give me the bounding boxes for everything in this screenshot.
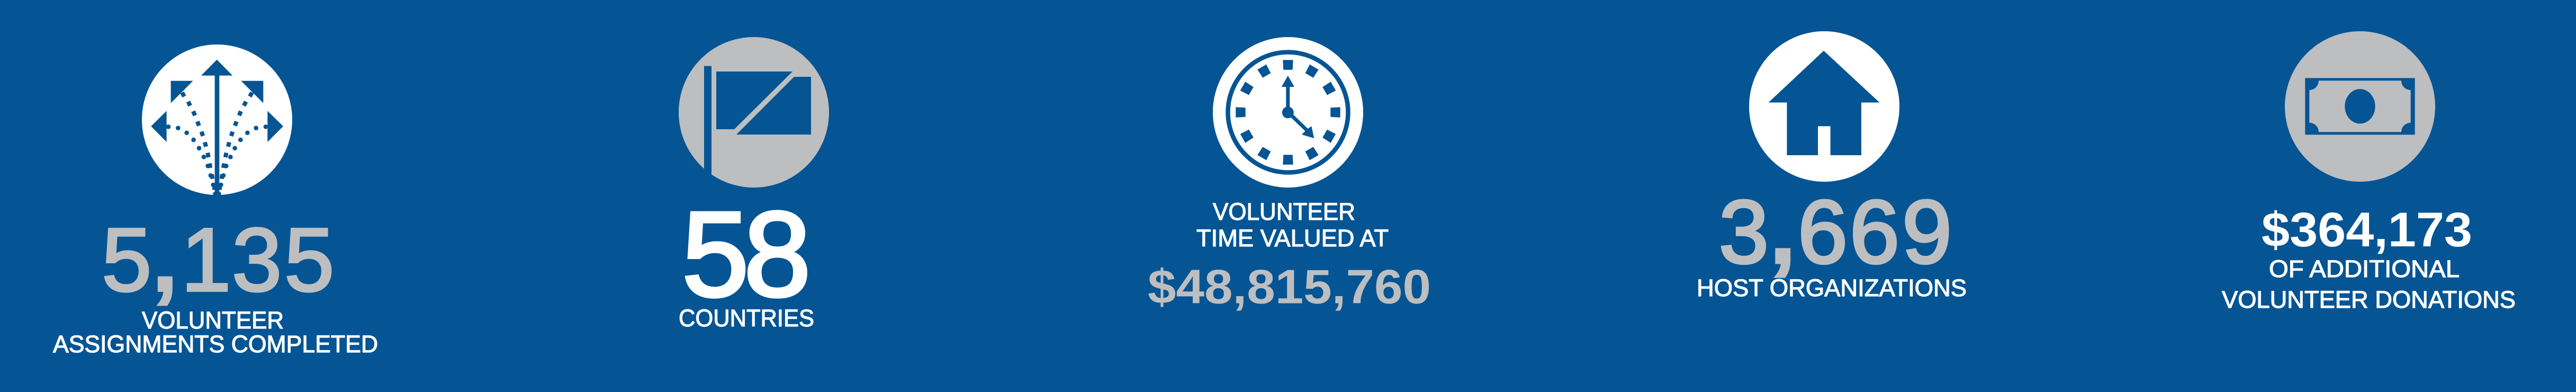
icon: dollar bill <box>2285 31 2435 182</box>
label: volunteer time valued at <box>1196 198 1389 252</box>
label: volunteer time valued at: VOLUNTEER <box>1213 198 1355 225</box>
label: volunteer time valued at: TIME VALUED AT <box>1196 225 1389 252</box>
number: $48,815,760: $48,815,760 <box>1148 261 1431 314</box>
label: volunteer assignments completed <box>53 307 378 358</box>
panel: countries <box>679 37 829 332</box>
label: host organizations: HOST ORGANIZATIONS <box>1697 274 1967 301</box>
panel: additional donations <box>2222 31 2516 313</box>
label: volunteer assignments completed: VOLUNTEER <box>142 307 284 334</box>
icon: clock <box>1213 37 1363 188</box>
icon: spreading arrows <box>142 44 292 197</box>
label: of additional volunteer donations: OF ADDITIONAL <box>2269 255 2460 282</box>
number: 5,135: 5,135 <box>102 210 335 310</box>
number: 3,669: 3,669 <box>1719 182 1952 282</box>
icon: house <box>1749 31 1899 182</box>
label: of additional volunteer donations <box>2222 255 2516 313</box>
panel: host organizations <box>1697 31 1967 301</box>
panel: volunteer time value <box>1148 37 1431 314</box>
number: 58: 58 <box>682 188 811 322</box>
label: volunteer assignments completed: ASSIGNMENTS COMPLETED <box>53 331 378 358</box>
panel: volunteer assignments <box>53 44 378 358</box>
number: $364,173: $364,173 <box>2262 203 2472 257</box>
label: countries: COUNTRIES <box>679 305 814 332</box>
label: of additional volunteer donations: VOLUNTEER DONATIONS <box>2222 286 2516 313</box>
icon: flag <box>679 37 829 188</box>
